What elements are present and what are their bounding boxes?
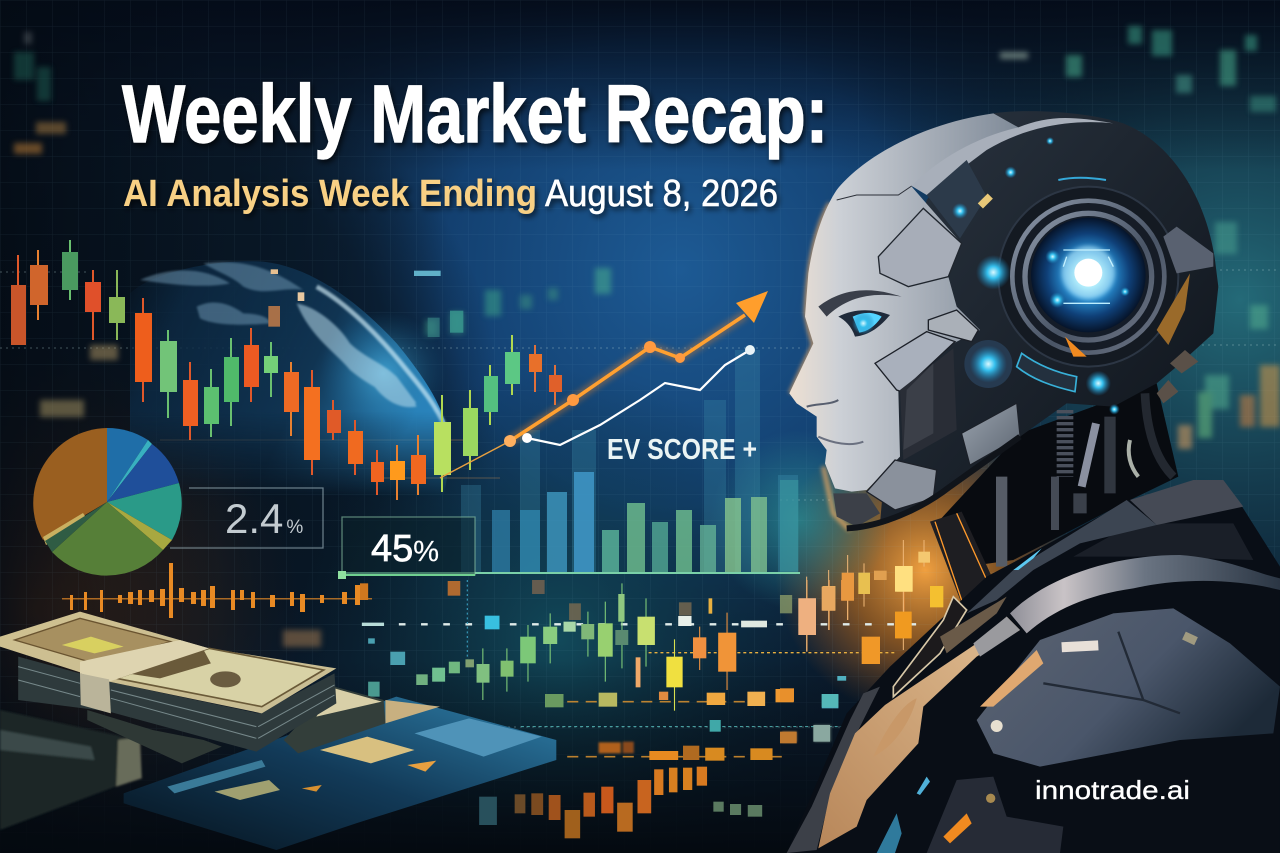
- callout: 45%: [338, 517, 475, 579]
- face: [789, 113, 1018, 492]
- eye: [838, 310, 890, 337]
- tan chest plate: [818, 617, 1020, 848]
- subtitle: [123, 173, 778, 215]
- right candles behind neck: [780, 480, 943, 743]
- silver arc: [1010, 555, 1280, 633]
- background bar chart: [340, 350, 800, 573]
- brand label: innotrade.ai: [1035, 775, 1190, 805]
- main stack top: [0, 612, 336, 713]
- lower candlestick field: [360, 580, 930, 838]
- globe: [130, 261, 463, 497]
- temple plate: [878, 208, 962, 287]
- collar band: [967, 500, 1157, 613]
- faint background candles: [14, 26, 1280, 647]
- callout: 2.4%: 2.4%: [225, 495, 303, 542]
- orange mini volume chart: [62, 563, 372, 618]
- callout: 2.4%: [170, 488, 323, 548]
- lower plate: [927, 777, 1063, 853]
- cheek plates: [875, 332, 955, 392]
- lower back stack: [284, 687, 385, 753]
- EV score label: EV SCORE +: [607, 434, 757, 466]
- callout: 45%: 45%: [371, 528, 439, 570]
- orange rising arrow: [440, 291, 768, 478]
- robot body and armor: [787, 480, 1280, 853]
- robot head: [789, 111, 1218, 530]
- brow: [818, 290, 902, 317]
- top silver plate: [912, 118, 1113, 195]
- subtitle: AI Analysis Week Ending: [123, 173, 537, 215]
- shoulder armor: [977, 608, 1280, 767]
- left candlestick chart: [11, 240, 562, 500]
- paper band: [80, 640, 209, 682]
- helmet dark: [880, 111, 1218, 523]
- dark blurred stack: [0, 710, 142, 830]
- blue banknotes: [124, 697, 556, 850]
- jaw rim: [847, 437, 1020, 528]
- left armor fringe: [787, 687, 880, 853]
- white trend line: [522, 345, 755, 445]
- lens housing: [998, 187, 1178, 367]
- mesh under collar: [1073, 523, 1253, 560]
- subtitle: August 8, 2026: [545, 173, 778, 215]
- orange rim glow: [791, 203, 850, 530]
- money stacks: [0, 612, 556, 850]
- nose and mouth: [807, 400, 838, 407]
- pie chart: [33, 428, 182, 576]
- side helmet plate: [1163, 227, 1213, 273]
- main stack side: [18, 657, 336, 752]
- title: Weekly Market Recap:: [122, 69, 828, 160]
- robot neck: [930, 383, 1178, 617]
- small glowing dots: [976, 255, 1011, 290]
